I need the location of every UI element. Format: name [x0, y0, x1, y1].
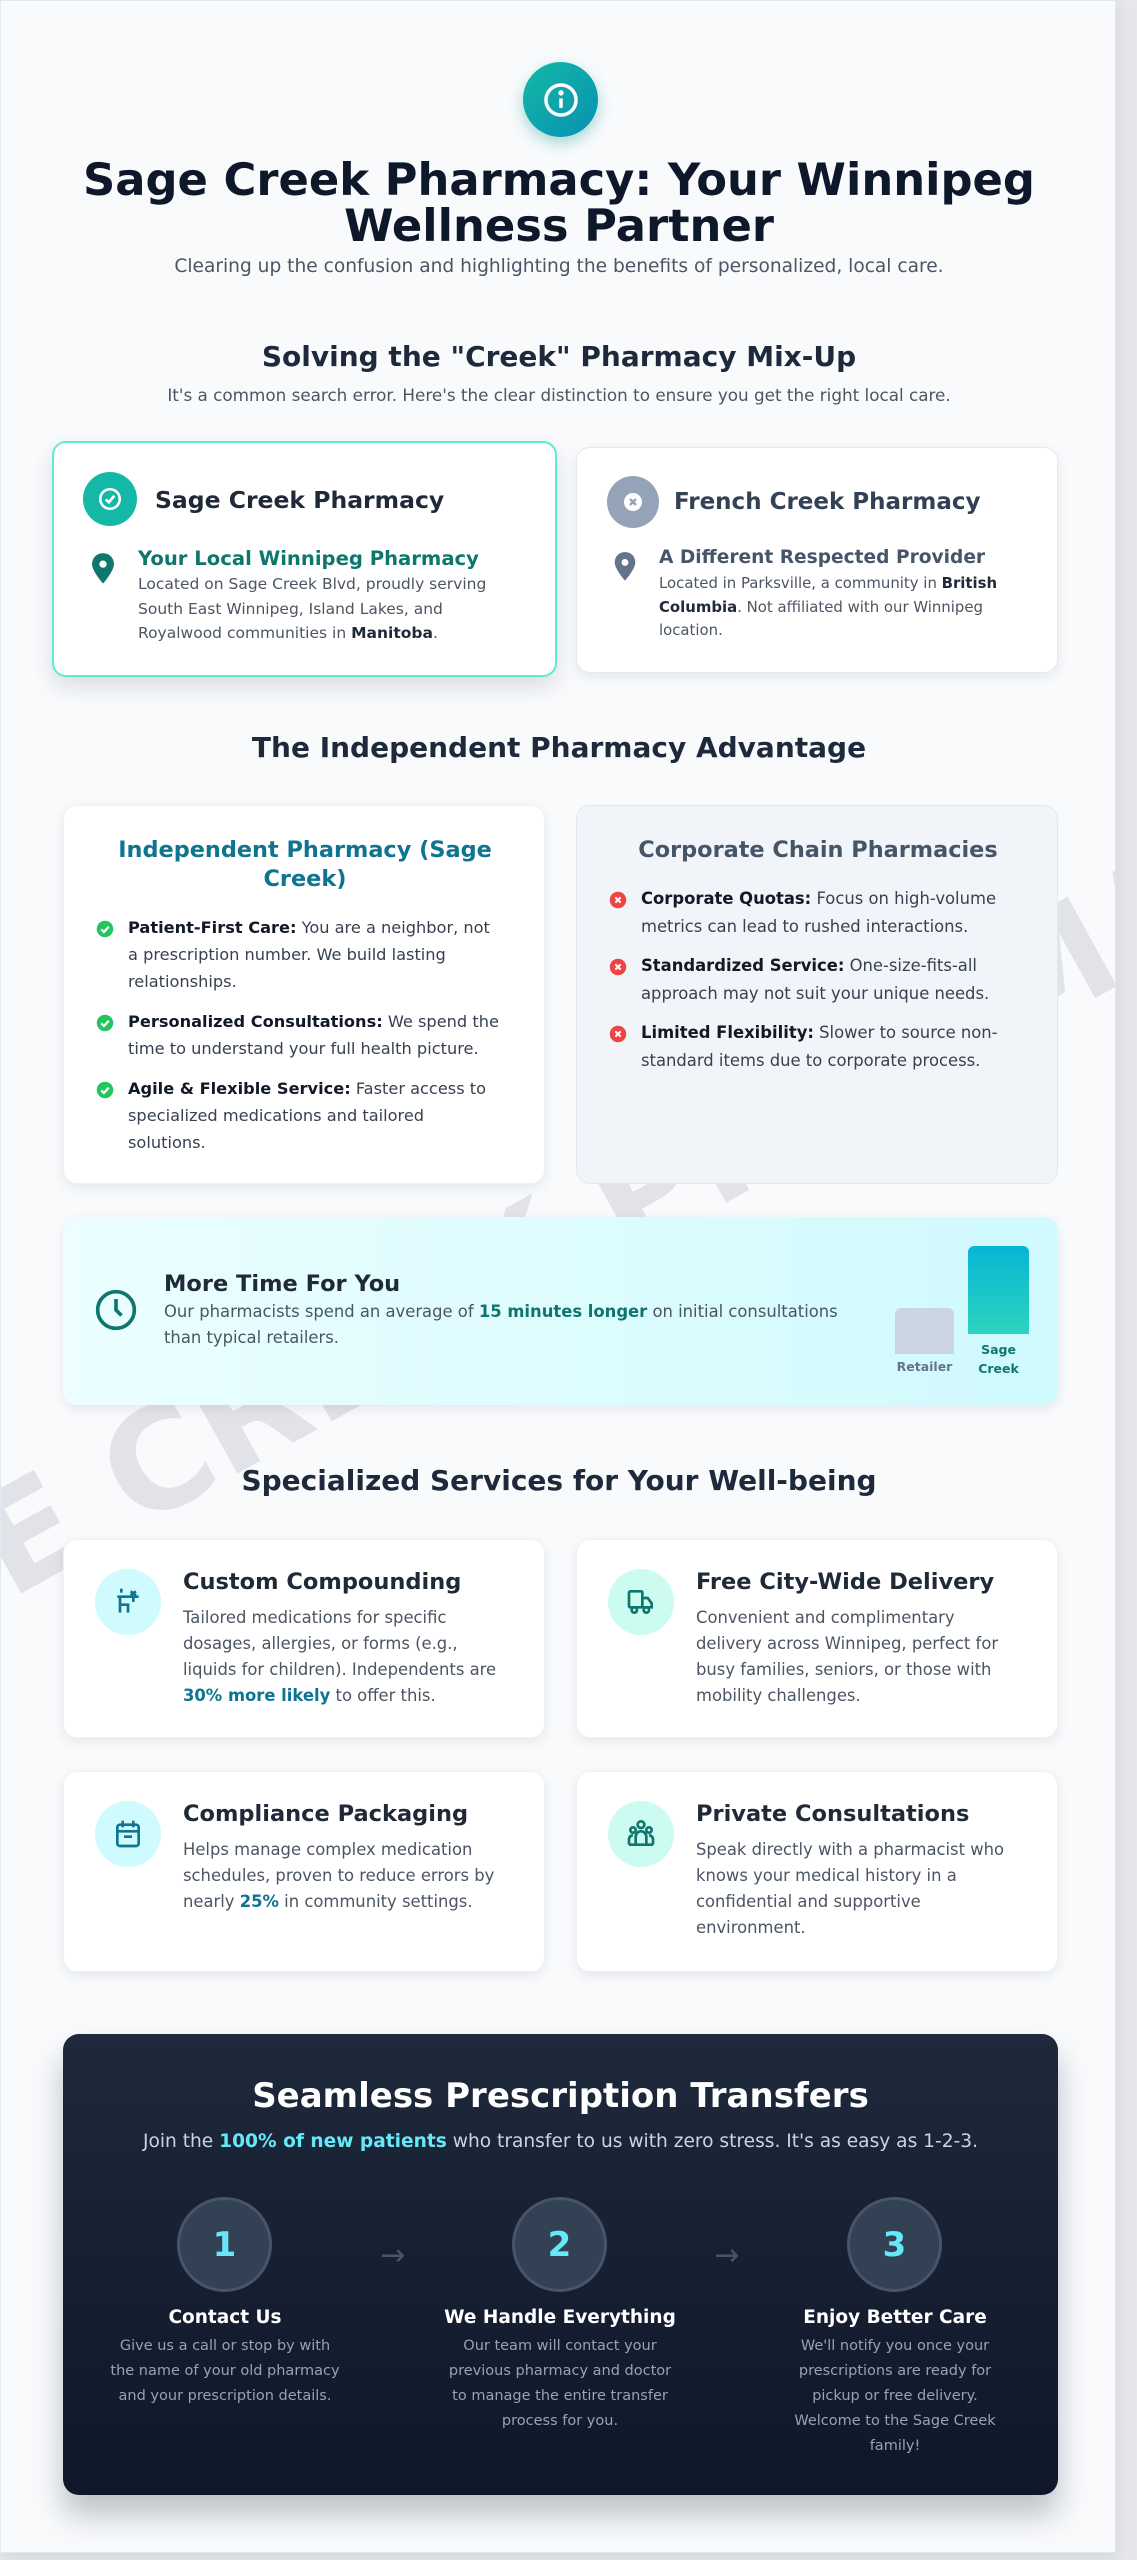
- icon: pin: [92, 553, 114, 584]
- step 2: 2: [548, 2224, 571, 2264]
- heading: Private Consultations: [696, 1801, 969, 1827]
- heading: More Time For You: [164, 1271, 400, 1297]
- step 3: [794, 2197, 996, 2454]
- text: Helps manage complex medication schedules, proven to reduce errors by nearly 25% in community settings.: [183, 1840, 494, 1911]
- bar chart: Retailer: [897, 1359, 952, 1374]
- icon: check: [83, 472, 137, 526]
- icon: info: [523, 62, 598, 137]
- text: Located on Sage Creek Blvd, proudly serving South East Winnipeg, Island Lakes, and Royalwood communities in Manitoba.: [138, 575, 486, 642]
- panel: delivery: [576, 1539, 1058, 1738]
- list: benefits: relationships.: [128, 972, 237, 991]
- title: Wellness Partner: [344, 199, 774, 252]
- text: Convenient and complimentary delivery across Winnipeg, perfect for busy families, seniors, or those with mobility challenges.: [696, 1608, 998, 1705]
- icon: truck: [608, 1569, 674, 1635]
- title: Sage Creek Pharmacy: Your Winnipeg: [83, 153, 1035, 206]
- text: Join the 100% of new patients who transfer to us with zero stress. It's as easy as 1-2-3.: [143, 2131, 978, 2152]
- heading: services: Specialized Services for Your Well-being: [241, 1464, 877, 1497]
- heading: French Creek Pharmacy: [674, 489, 981, 515]
- heading: Compliance Packaging: [183, 1801, 468, 1827]
- icon: pin: [614, 552, 636, 581]
- heading: Independent Pharmacy (Sage Creek): [118, 837, 492, 892]
- heading: Corporate Chain Pharmacies: [638, 837, 998, 863]
- list: benefits: Personalized Consultations: We spend the: [128, 1012, 499, 1031]
- title: [83, 153, 1035, 252]
- heading: Seamless Prescription Transfers: [252, 2076, 869, 2116]
- icon: compounding: [95, 1569, 161, 1635]
- icon: calendar: [95, 1801, 161, 1867]
- heading: advantage: The Independent Pharmacy Advantage: [252, 731, 866, 764]
- heading: Custom Compounding: [183, 1569, 461, 1595]
- icon: x: [607, 476, 659, 528]
- step 3: We'll notify you once your prescriptions are ready for pickup or free delivery. Welcome to the Sage Creek family!: [794, 2338, 996, 2454]
- panel: Sage Creek card: [52, 441, 557, 677]
- list: drawbacks: Standardized Service: One-size-fits-all approach may not suit your unique needs.: [641, 956, 989, 1003]
- step 3: 3: [883, 2224, 906, 2264]
- heading: Sage Creek Pharmacy: [155, 486, 444, 514]
- panel: French Creek card: [576, 447, 1058, 673]
- subheading: A Different Respected Provider: [659, 547, 985, 568]
- list: drawbacks: Corporate Quotas: Focus on high-volume metrics can lead to rushed interactions.: [641, 889, 996, 936]
- text: mix-up intro: It's a common search error. Here's the clear distinction to ensure you get the right local care.: [167, 385, 951, 405]
- list: benefits: time to understand your full health picture.: [128, 1039, 479, 1058]
- step 2: We Handle Everything: [444, 2307, 676, 2328]
- list: benefits: Agile & Flexible Service: Faster access to: [128, 1079, 486, 1098]
- step 1: Contact Us: [168, 2307, 282, 2328]
- panel: private consultations: [576, 1771, 1058, 1972]
- panel: corporate: [576, 805, 1058, 1184]
- list: drawbacks: [610, 889, 998, 1070]
- arrow: →: [380, 2238, 406, 2273]
- bar chart: [895, 1246, 1029, 1376]
- step 3: Enjoy Better Care: [803, 2307, 987, 2328]
- step 2: [444, 2197, 676, 2429]
- list: benefits: solutions.: [128, 1133, 206, 1152]
- panel: compliance packaging: [63, 1771, 545, 1972]
- bar chart: Creek: [978, 1361, 1019, 1376]
- text: Tailored medications for specific dosages, allergies, or forms (e.g., liquids for children). Independents are 30% more likely to offer this.: [183, 1608, 496, 1705]
- step 1: [110, 2197, 340, 2404]
- text: Our pharmacists spend an average of 15 minutes longer on initial consultations than typical retailers.: [164, 1302, 838, 1347]
- list: benefits: a prescription number. We build lasting: [128, 945, 446, 964]
- panel: independent: [63, 805, 545, 1184]
- panel: more time banner: [63, 1217, 1058, 1405]
- heading: Free City-Wide Delivery: [696, 1569, 994, 1595]
- subheading: Your Local Winnipeg Pharmacy: [138, 547, 479, 570]
- list: benefits: specialized medications and tailored: [128, 1106, 424, 1125]
- step 2: Our team will contact your previous pharmacy and doctor to manage the entire transfer process for you.: [449, 2338, 671, 2429]
- text: Speak directly with a pharmacist who knows your medical history in a confidential and supportive environment.: [696, 1840, 1004, 1937]
- list: drawbacks: Limited Flexibility: Slower to source non-standard items due to corporate process.: [641, 1023, 998, 1070]
- subtitle: Clearing up the confusion and highlighting the benefits of personalized, local care.: [174, 256, 944, 277]
- text: Located in Parksville, a community in British Columbia. Not affiliated with our Winnipeg location.: [659, 574, 997, 639]
- step 1: 1: [213, 2224, 236, 2264]
- step 1: Give us a call or stop by with the name of your old pharmacy and your prescription details.: [110, 2338, 340, 2404]
- arrow: →: [714, 2238, 740, 2273]
- bar chart: Sage: [981, 1342, 1016, 1357]
- icon: clock: [96, 1290, 136, 1330]
- list: benefits: [96, 918, 499, 1152]
- list: benefits: Patient-First Care: You are a neighbor, not: [128, 918, 490, 937]
- panel: custom compounding: [63, 1539, 545, 1738]
- icon: people: [608, 1801, 674, 1867]
- panel: transfers: [63, 2034, 1058, 2495]
- heading: mix-up: Solving the "Creek" Pharmacy Mix-Up: [262, 340, 856, 373]
